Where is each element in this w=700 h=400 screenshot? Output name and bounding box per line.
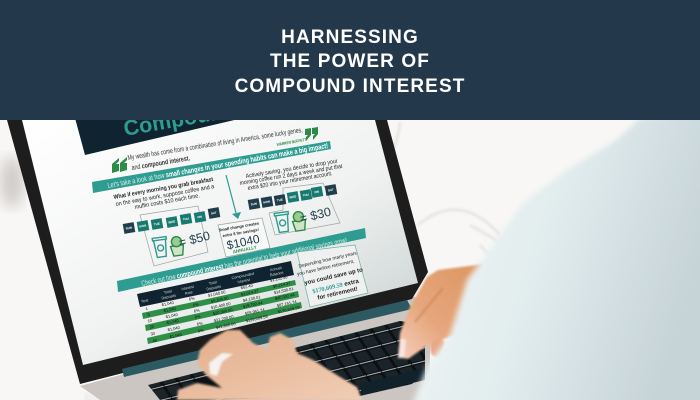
right paragraph: morning coffee run 2 days a week and put that [239,164,343,187]
table values: $87,151.74 [276,299,298,308]
header banner [0,0,700,120]
left week calendar: FRI [197,215,203,219]
table values: $10,400.00 [210,301,232,310]
headline: COMPOUND INTEREST [235,76,465,97]
right paragraph: Actively saving, you decide to drop your [245,159,338,180]
banner: compound interest: Check out how compound interest has the potential to help your additional savings grow! [141,235,348,288]
table header: Compounded [231,272,254,280]
quote text: and compound interest. [131,155,191,172]
left paragraph: on the way to work, suppose coffee and a [115,184,215,208]
table header: Rate [184,290,193,296]
icon: opening quote mark [112,157,127,173]
left total: = $50 [177,229,211,250]
left paragraph: muffin costs $10 each time. [134,193,201,211]
table values: 30 [150,330,156,336]
callout: savings total: you could save up to [304,267,364,287]
icon: coffee and muffin, left [152,234,185,259]
table values: $41,600.00 [215,321,237,330]
table [137,261,302,344]
left week calendar: WED [168,219,176,225]
table header: Year [141,298,150,304]
right paragraph: extra $20 into your retirement account. [247,171,333,192]
callout: annual savings: Small change creates [218,220,260,233]
right week calendar: THU [302,193,309,198]
table values: $20,800.00 [212,307,234,316]
right hand [398,264,485,359]
left week calendar: SUN [125,225,132,231]
callout: savings total: for retirement! [317,286,358,302]
table values: $1,040 [167,325,181,332]
table values: 20 [149,323,155,329]
callout: savings total: $170,609.59 extra [312,278,360,295]
callout: savings total [297,245,368,307]
right week calendar: WED [289,194,297,200]
table values: 6% [194,313,201,320]
icon: closing quote mark [305,127,318,141]
keyboard [148,321,425,400]
hinge strip [122,300,412,377]
infographic title: Compound Interest [122,83,320,141]
quote attribution: WARREN BUFFETT [276,137,307,147]
callout: annual savings: ANNUALLY [232,245,257,255]
callout: savings total: you have before retirement, [297,259,355,278]
table values: $55,951.74 [244,307,266,316]
headline: HARNESSING [281,27,419,48]
left week calendar: SAT [211,211,217,215]
right paragraph [239,159,343,192]
table values: $170,609.59 [277,305,301,314]
right total: = $30 [298,205,332,226]
table header: Deposits [206,285,222,292]
table values: 6% [197,327,204,334]
infographic title [75,83,320,155]
table row stripes [142,280,302,344]
table header: Interest [237,278,251,284]
table values: $1,040.00 [207,289,227,298]
laptop screen bezel [7,120,428,384]
headline [235,27,465,97]
table values: $1,040 [163,306,177,313]
left hand with ring [177,330,362,400]
table values: $31,200.00 [213,314,235,323]
table values: $19,702.44 [242,300,264,309]
table values: $1,040 [165,312,179,319]
table header: Interest [181,285,195,291]
quote text [127,127,303,172]
right week calendar: TUE [277,198,283,203]
table header: Annual [270,266,282,272]
callout: savings total: Depending how many years [298,250,358,270]
table header: Total [208,280,217,286]
table values: 1 [145,306,149,311]
table values: $1,040 [166,318,180,325]
left week calendar: MON [139,223,147,229]
right week calendar [248,183,340,235]
right week calendar: SUN [250,201,257,207]
callout: annual savings [218,218,270,257]
right week calendar: FRI [314,190,320,194]
banner: small changes [92,141,331,193]
right week calendar: MON [263,199,271,205]
table values: $1,040 [161,300,175,307]
headline: THE POWER OF [270,51,430,72]
table values [145,274,301,343]
table values: 6% [192,301,199,308]
table values: 40 [152,337,158,343]
right week calendar: SAT [328,188,334,192]
quote text: My wealth has come from a combination of living in America, some lucky genes, [127,127,303,162]
table values: $129,009.59 [245,314,269,323]
table header: Balance [270,271,284,277]
table values: 6% [196,320,203,327]
callout: annual savings: $1040 [225,232,261,252]
quote [112,127,318,173]
table values: $14,530.01 [273,286,295,295]
arrow [226,175,241,219]
table values: $5,200.00 [210,295,230,304]
left week calendar: TUE [154,222,160,227]
table values: $1,040 [169,332,183,339]
table values: $62.40 [240,283,254,290]
table values: 5 [147,312,151,317]
table header: Total [163,289,172,295]
icon: coffee and muffin, right [274,209,307,234]
table values: $1,102.40 [269,274,289,283]
left paragraph: What if every morning you grab breakfast [113,177,214,201]
table values: 6% [193,307,200,314]
laptop base [80,296,430,400]
callout: annual savings: extra $ for savings! [222,227,259,238]
table values: $1,014.37 [240,288,260,297]
table header: Deposits [161,294,177,301]
table values: 10 [147,317,153,323]
table values: 6% [188,295,195,302]
laptop screen [22,83,418,365]
banner: small changes: Let's take a look at how small changes in your spending habits can make a big impact! [107,141,329,190]
table values: $4,130.01 [242,294,262,303]
table header [137,261,294,307]
person shoulder [410,110,700,400]
left paragraph [113,177,215,211]
table values: $40,502.44 [274,292,296,301]
table values: $6,214.37 [272,280,292,289]
left week calendar: THU [182,217,189,222]
left week calendar [123,206,220,266]
